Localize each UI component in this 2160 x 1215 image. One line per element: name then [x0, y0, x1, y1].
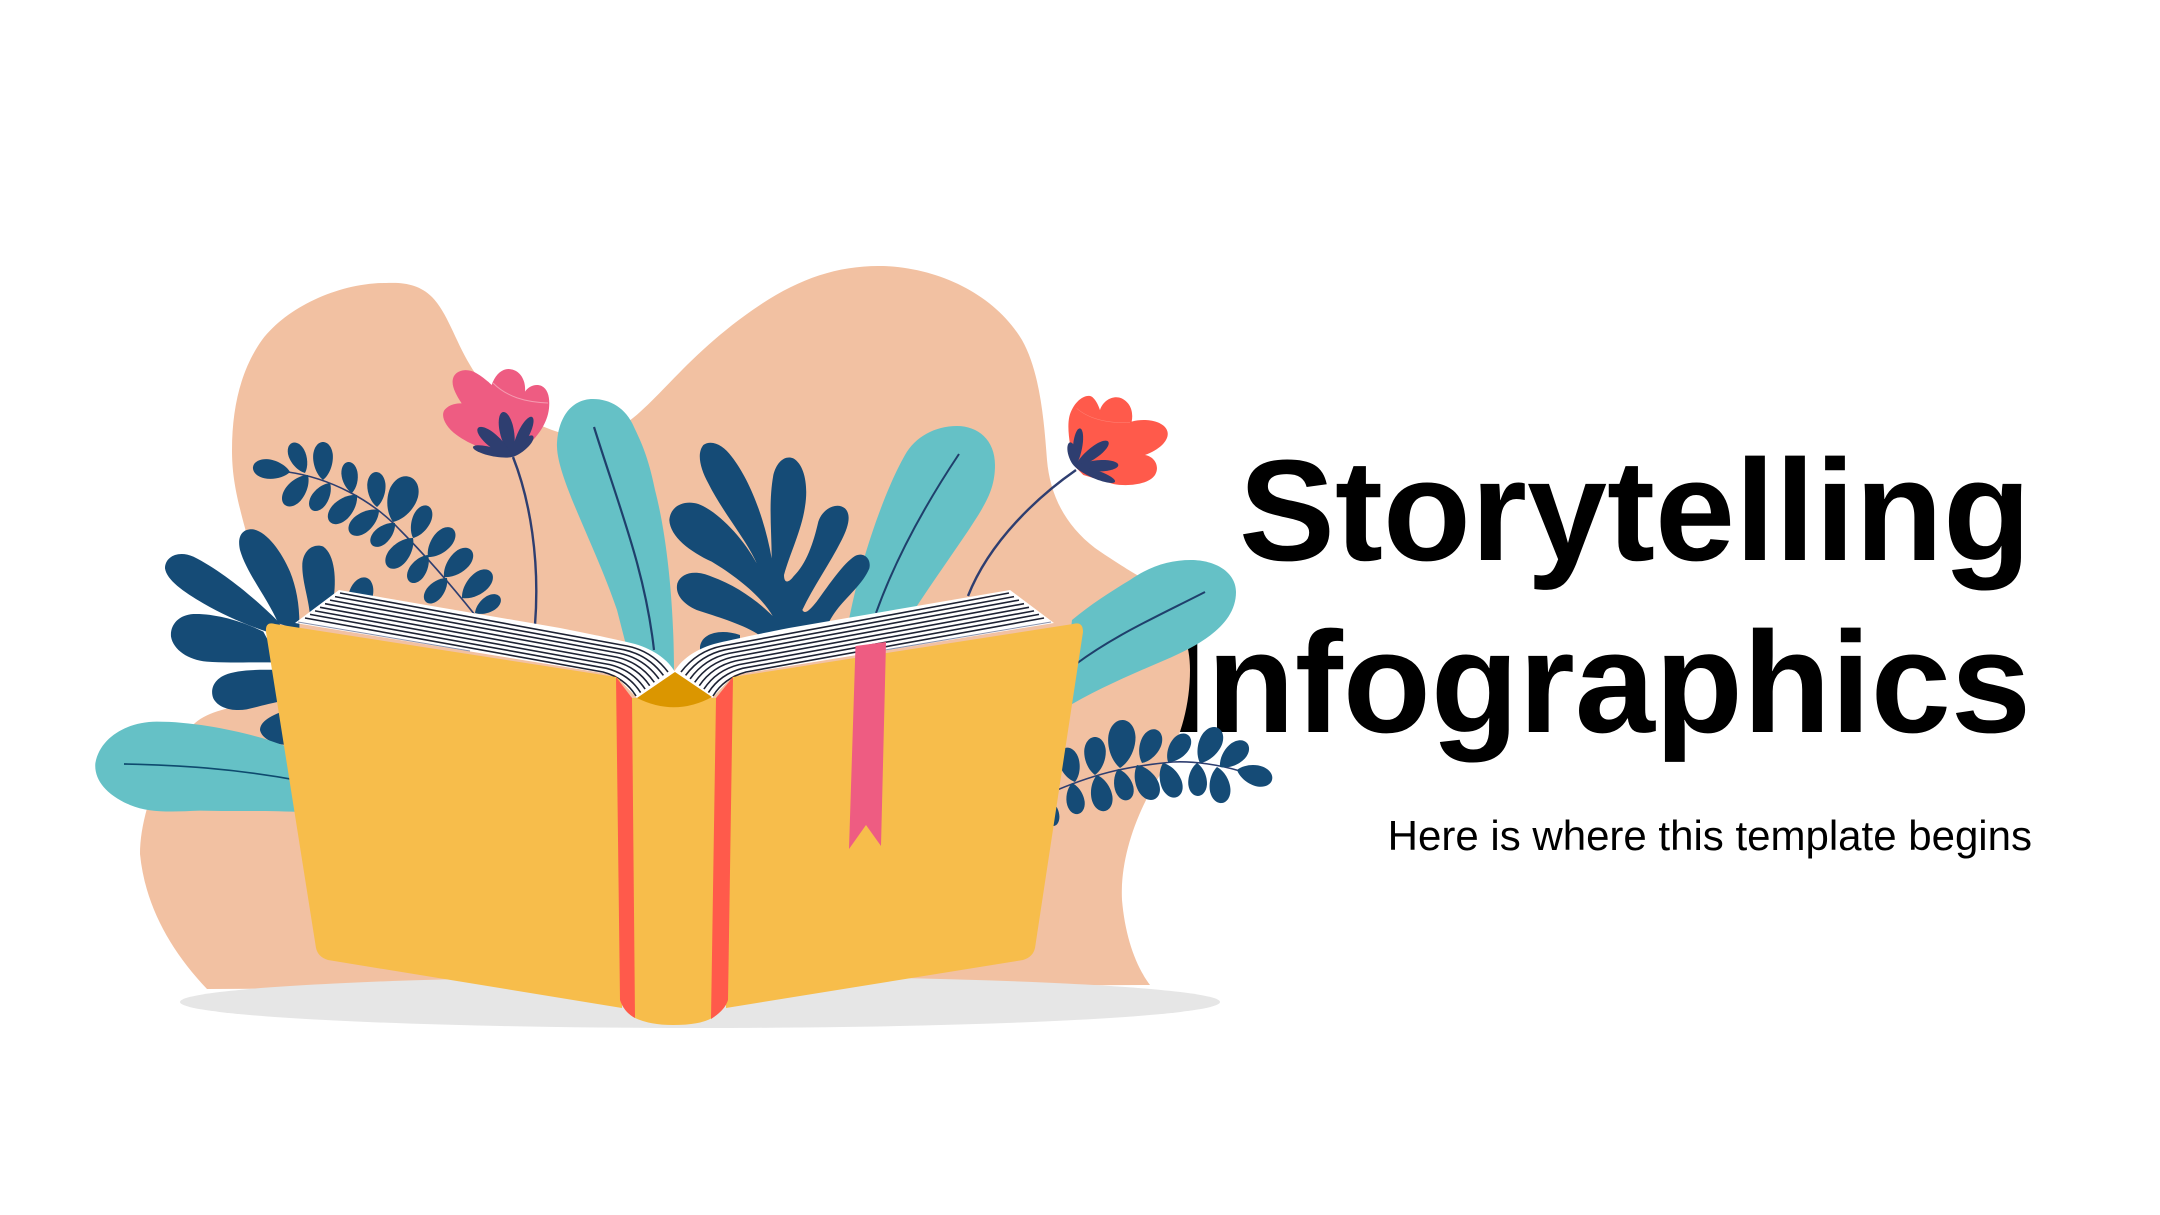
- book pages: right: [674, 590, 1054, 698]
- book spine: [620, 698, 728, 1025]
- red flower: [968, 396, 1168, 596]
- teal leaf: center right: [848, 426, 995, 625]
- teal leaf: lower left: [95, 722, 307, 812]
- bookmark ribbon: [849, 642, 886, 849]
- title: Storytelling: [1239, 430, 2031, 591]
- ground shadow: [180, 976, 1220, 1028]
- title: Infographics: [1167, 602, 2031, 763]
- spine stripe: right: [711, 677, 733, 1019]
- fern: upper left: [252, 440, 504, 620]
- book pages: left: [295, 590, 675, 698]
- leaf plant: center: [669, 443, 870, 653]
- teal leaf: center left: [557, 399, 674, 672]
- book cover: left: [266, 623, 622, 1008]
- leaf plant: left: [165, 529, 373, 745]
- subtitle: Here is where this template begins: [1388, 812, 2032, 859]
- peach background blob: [140, 266, 1190, 989]
- book: [266, 590, 1083, 1025]
- title: [1167, 430, 2031, 763]
- book cover: right: [726, 623, 1083, 1008]
- fern: right: [1046, 719, 1275, 827]
- pink flower: [443, 369, 549, 625]
- teal leaf: far right: [1062, 560, 1236, 710]
- spine stripe: left: [616, 677, 635, 1018]
- spine top: [637, 672, 712, 707]
